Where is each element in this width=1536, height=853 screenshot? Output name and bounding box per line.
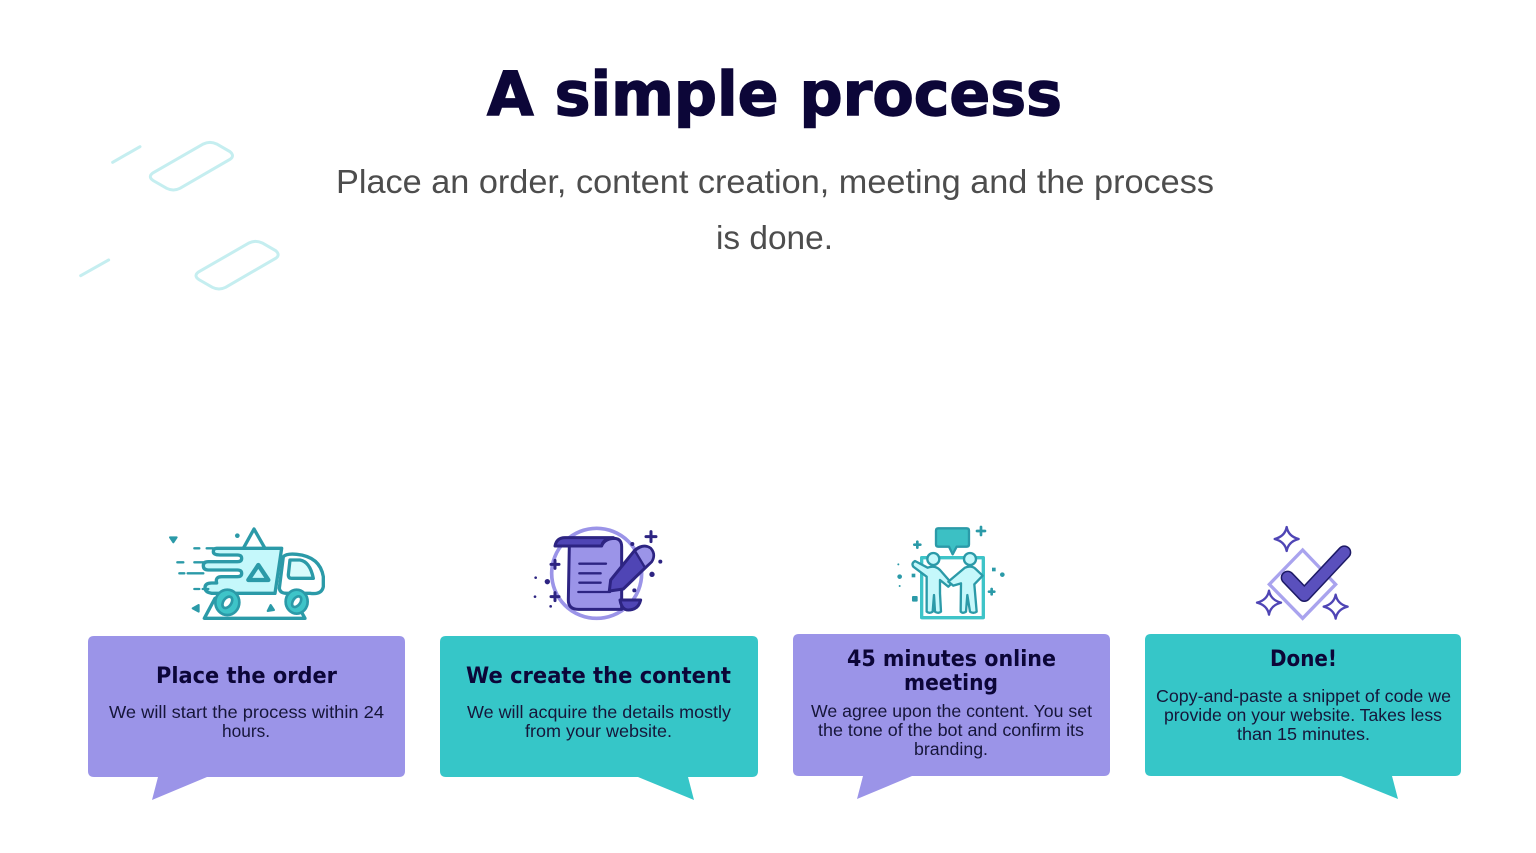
panel: done [1145, 634, 1461, 799]
icon: two people shaking hands [897, 527, 1005, 618]
description: We will start the process within 24 [109, 702, 384, 722]
heading: We create the content [466, 664, 731, 689]
description [467, 702, 731, 741]
subtitle [336, 163, 1214, 256]
description: the tone of the bot and confirm its [818, 720, 1084, 740]
icon: scroll and pen [534, 528, 662, 618]
decorative outlines [81, 142, 278, 289]
description [1156, 686, 1451, 744]
description: We agree upon the content. You set [811, 701, 1092, 721]
heading: meeting [904, 671, 998, 696]
panel: create the content [440, 636, 758, 800]
panel: place the order [88, 636, 405, 800]
heading: 45 minutes online [847, 647, 1056, 672]
heading: Place the order [156, 664, 337, 689]
icon: delivery truck [170, 529, 323, 618]
subtitle: is done. [716, 219, 833, 256]
description [811, 701, 1092, 759]
speech bubble [440, 636, 758, 800]
description: branding. [914, 739, 988, 759]
description [109, 702, 384, 741]
description: provide on your website. Takes less [1164, 705, 1442, 725]
heading [847, 647, 1056, 696]
description: Copy-and-paste a snippet of code we [1156, 686, 1451, 706]
description: than 15 minutes. [1237, 724, 1370, 744]
speech bubble [88, 636, 405, 800]
subtitle: Place an order, content creation, meeting and the process [336, 163, 1214, 200]
speech bubble [793, 634, 1110, 799]
speech bubble [1145, 634, 1461, 799]
description: We will acquire the details mostly [467, 702, 731, 722]
title: A simple process [487, 59, 1062, 130]
icon: check mark [1257, 527, 1348, 619]
description: from your website. [525, 721, 672, 741]
heading: Done! [1270, 647, 1337, 672]
panel: online meeting [793, 634, 1110, 799]
description: hours. [222, 721, 270, 741]
